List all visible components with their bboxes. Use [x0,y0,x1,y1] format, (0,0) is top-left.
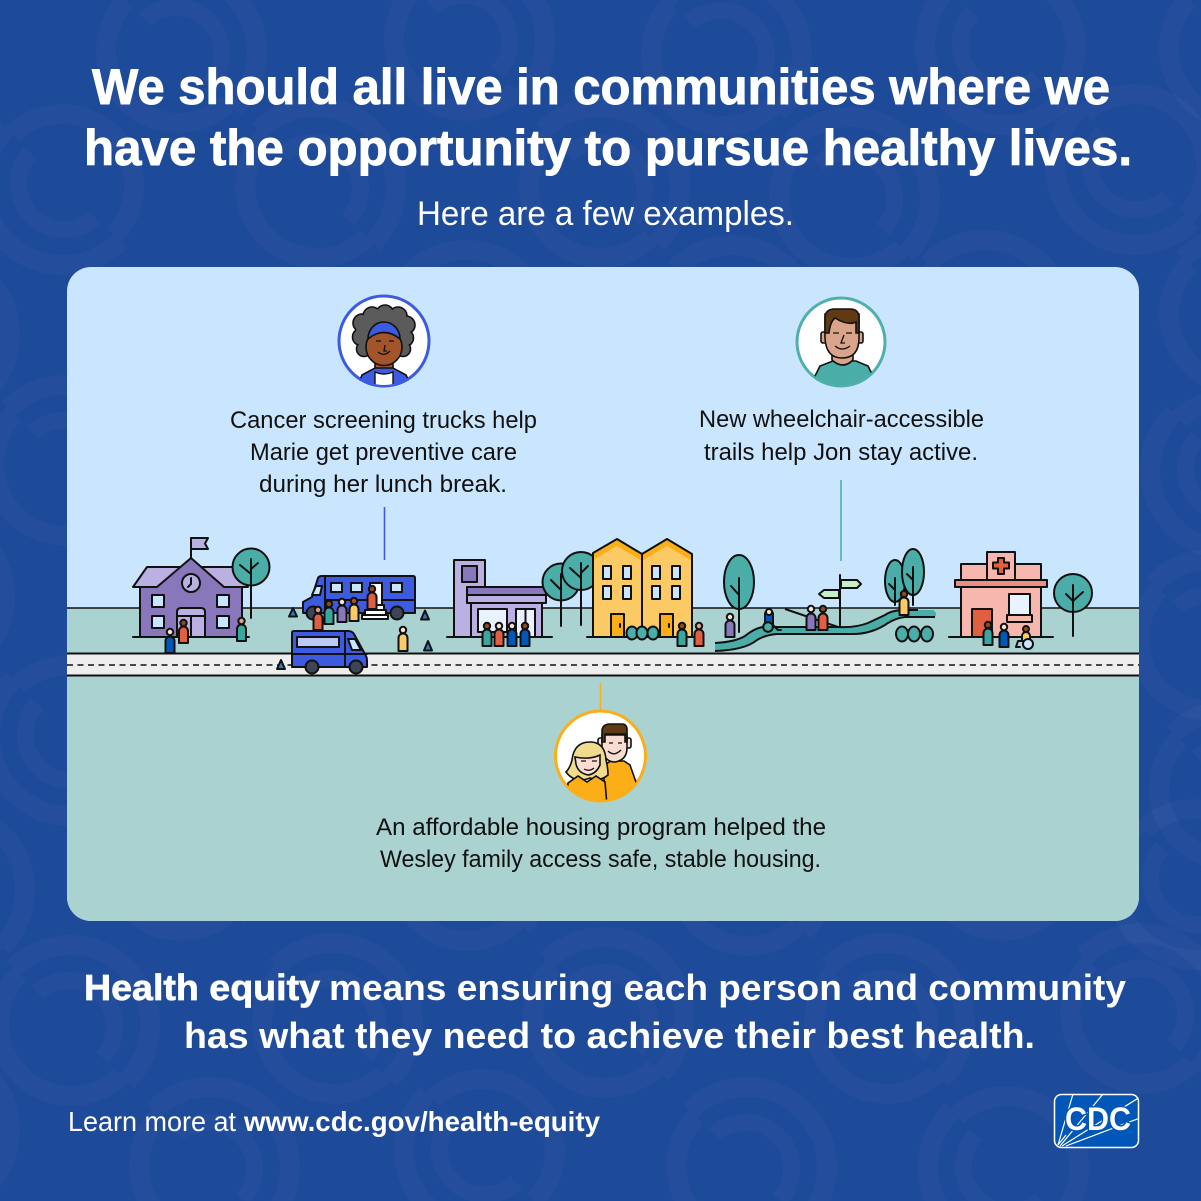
Marie caption: Cancer screening trucks help [230,407,537,434]
health equity statement [84,967,1126,1056]
people at bus [314,586,408,651]
Jon caption [699,406,984,466]
learn more link [68,1106,600,1137]
leader lines [384,480,841,710]
person by trail [726,614,734,637]
clinic [949,552,1053,637]
avatar: Jon [797,298,885,392]
van [292,631,367,674]
title: We should all live in communities where we [92,59,1110,115]
Marie caption: during her lunch break. [259,471,507,498]
people at apartments [678,623,704,646]
Marie caption [230,407,537,498]
health equity statement: means ensuring each person and community [329,967,1126,1008]
health equity statement: has what they need to achieve their best health. [184,1015,1035,1056]
store [447,560,552,637]
wheelchair user on trail [763,609,781,632]
cones [277,608,432,669]
Jon caption: New wheelchair-accessible [699,406,984,433]
clinic tree [1054,574,1092,636]
school [133,538,249,637]
person on trail rise [900,591,908,615]
Wesley caption: An affordable housing program helped the [376,814,826,841]
Jon caption: trails help Jon stay active. [704,439,978,466]
accessible trail [715,609,936,651]
learn more link: www.cdc.gov/health-equity [243,1106,600,1137]
people at clinic [984,622,1033,649]
people at store [482,623,530,646]
trail sign [819,575,861,627]
oval tree [724,555,754,632]
panel: community scene [67,267,1139,921]
screening bus [303,576,415,620]
avatar: Wesley family [556,711,646,805]
Wesley caption [376,814,826,873]
road [67,653,1139,676]
CDC logo [1054,1094,1140,1148]
people on trail [806,606,828,630]
trees behind apartments [542,552,600,626]
CDC logo: CDC [1065,1101,1131,1137]
tree by school [232,548,270,618]
avatar: Marie [339,296,429,392]
title: have the opportunity to pursue healthy lives. [84,120,1132,176]
Wesley caption: Wesley family access safe, stable housing. [380,846,821,873]
trail trees [885,549,924,605]
learn more link: Learn more at [68,1106,236,1137]
subtitle: Here are a few examples. [417,195,794,233]
health equity statement: Health equity [84,967,320,1008]
title [84,59,1132,176]
bushes [896,626,933,642]
Marie caption: Marie get preventive care [250,439,517,466]
people at school [166,618,246,653]
apartments [587,539,700,640]
